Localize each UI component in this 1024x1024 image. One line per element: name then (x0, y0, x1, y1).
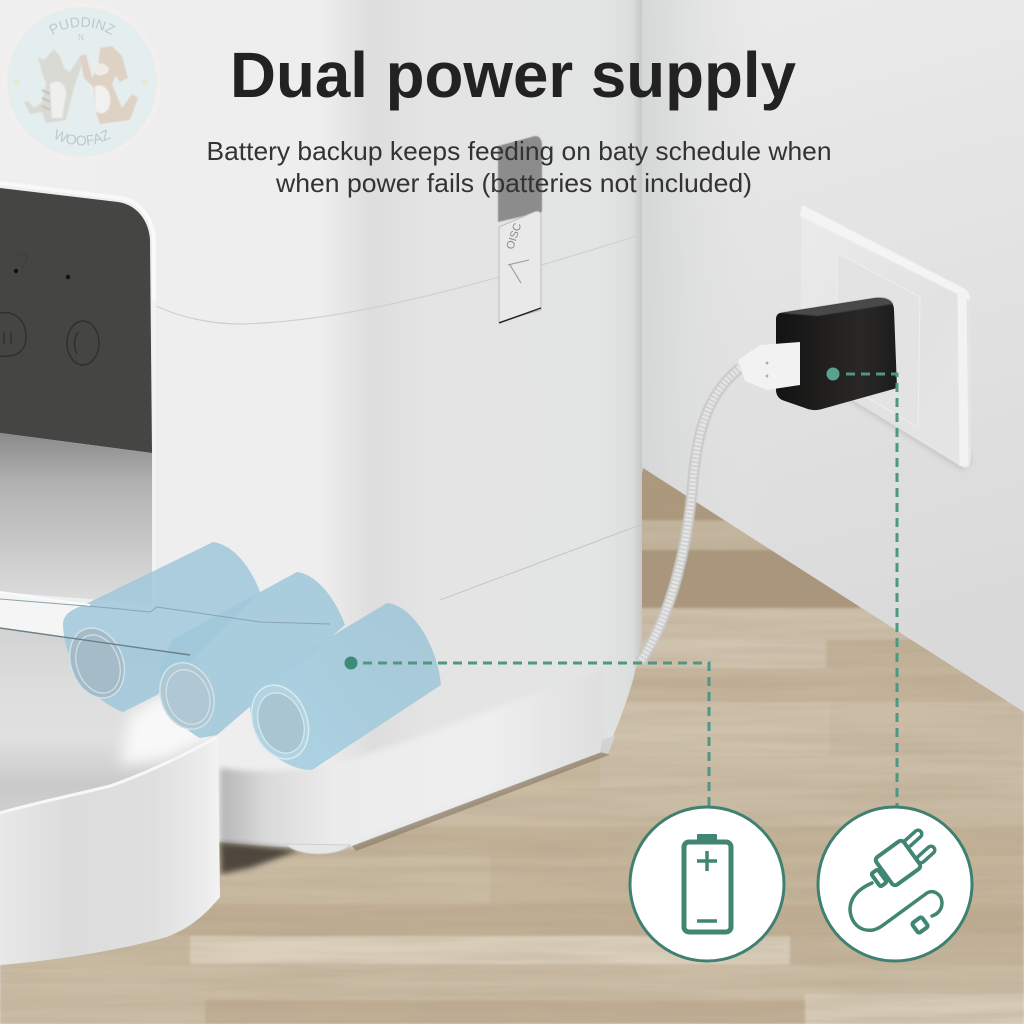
icon: battery (630, 807, 784, 961)
logo stars (14, 79, 148, 85)
bowl and chute (0, 628, 220, 965)
logo dog (80, 46, 138, 124)
description: when power fails (batteries not included) (275, 168, 752, 198)
chute edges (0, 592, 330, 655)
callout line: batteries (344, 656, 709, 806)
bowl highlight (118, 694, 214, 769)
battery 2 (151, 572, 345, 738)
feeder foot (286, 844, 350, 854)
feeder base band (220, 668, 607, 848)
battery 3 (242, 603, 441, 770)
logo text: N (78, 33, 84, 42)
indicator dots (14, 269, 70, 279)
callout line: outlet (826, 368, 897, 806)
floor shadow (220, 842, 300, 874)
chute lip (0, 592, 210, 655)
filling slot (498, 136, 542, 323)
feeder body (0, 0, 642, 874)
wooden floor (0, 460, 1024, 1024)
control panel (0, 183, 154, 604)
batteries (60, 542, 441, 770)
slot label: OISC (504, 222, 524, 251)
charger (738, 298, 897, 410)
logo text (49, 17, 116, 146)
wall outlet (800, 205, 972, 470)
logo text: PUDDINZ (49, 17, 116, 35)
description: Battery backup keeps feeding on baty schedule when (206, 136, 831, 166)
title: Dual power supply (230, 39, 796, 111)
logo cat (24, 49, 84, 123)
bowl rim (0, 737, 217, 813)
panel buttons (0, 254, 99, 365)
wall (640, 0, 1024, 730)
logo text: WOOFAZ (56, 129, 111, 146)
battery 1 (60, 542, 260, 712)
icon: plug and cable (818, 807, 972, 961)
USB plug (738, 342, 800, 390)
dispenser opening (0, 433, 152, 604)
description (206, 136, 831, 198)
power cable (640, 368, 740, 662)
logo badge (7, 7, 157, 157)
